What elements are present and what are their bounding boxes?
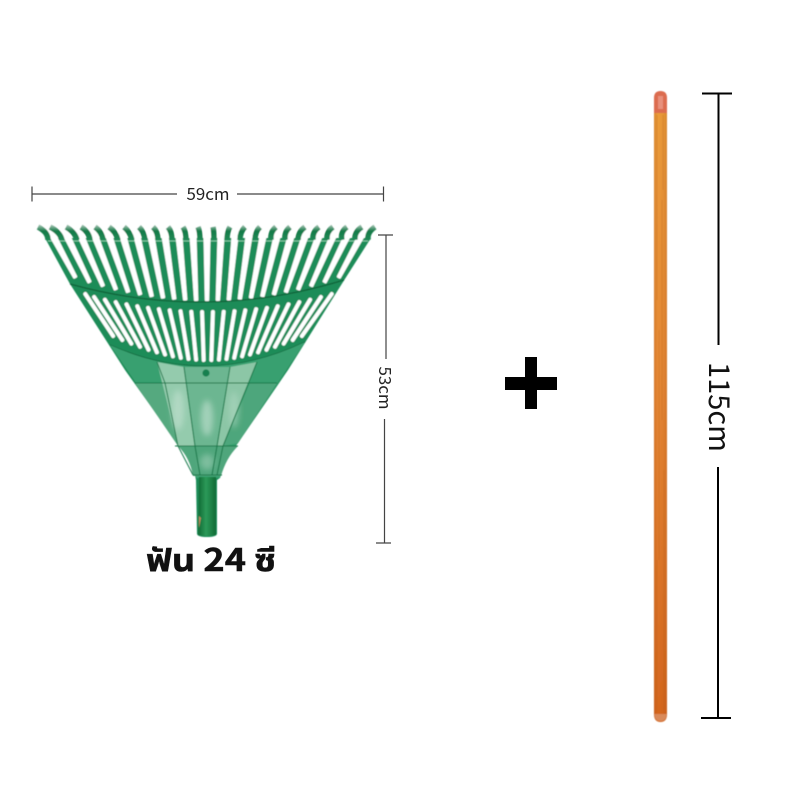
handle tip bbox=[654, 714, 666, 721]
handle shaft bbox=[654, 112, 667, 722]
icon: green leaf rake head bbox=[38, 223, 375, 537]
lower rib slots bbox=[85, 294, 332, 360]
caption: 24 teeth: ฟัน 24 ซี bbox=[146, 535, 276, 580]
height line top bbox=[378, 235, 393, 359]
length line top bbox=[702, 94, 732, 345]
dimension: handle length 115cm bbox=[700, 94, 742, 718]
width label: 59cm bbox=[186, 181, 230, 205]
length line bottom bbox=[701, 467, 731, 718]
lower rib arc bbox=[110, 342, 305, 366]
hooked tooth tips bbox=[38, 227, 375, 240]
height label: 53cm bbox=[374, 366, 398, 410]
wood grain bbox=[657, 115, 664, 712]
lower plate panels bbox=[110, 342, 305, 478]
width line left bbox=[32, 186, 177, 202]
width line right bbox=[237, 186, 384, 202]
icon: wooden handle bbox=[654, 91, 667, 722]
handle cap bbox=[654, 91, 667, 113]
plate dot bbox=[202, 369, 210, 377]
rake body silhouette bbox=[45, 238, 371, 537]
icon: plus sign bbox=[505, 357, 557, 409]
handle socket bbox=[198, 477, 216, 536]
pale band across teeth bbox=[48, 240, 368, 242]
handle shading bbox=[654, 112, 667, 722]
upper tooth gaps bbox=[44, 223, 370, 300]
height line bottom bbox=[376, 419, 391, 543]
dimension: rake height 53cm bbox=[374, 235, 398, 543]
upper rib arc bbox=[70, 280, 344, 302]
socket scuff bbox=[199, 516, 201, 528]
cap highlight bbox=[658, 96, 663, 109]
dimension: rake width 59cm bbox=[32, 181, 384, 205]
length label: 115cm bbox=[700, 362, 742, 452]
plate ribs bbox=[135, 362, 277, 475]
